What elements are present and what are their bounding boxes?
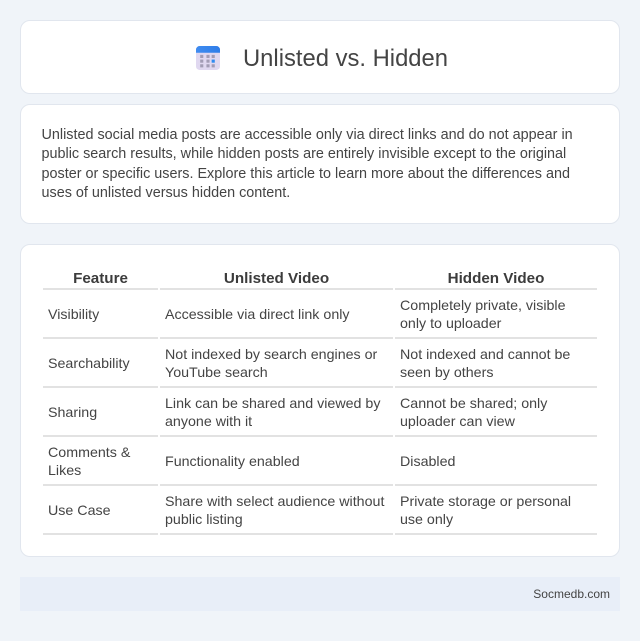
intro text: uses of unlisted versus hidden content. bbox=[42, 185, 290, 201]
row: sharing: Cannot be shared; only bbox=[400, 396, 547, 412]
row: visibility bbox=[48, 298, 566, 332]
panel: comparison table bbox=[20, 244, 620, 557]
intro text: poster or specific users. Explore this article to learn more about the differences and bbox=[42, 166, 570, 182]
row: searchability: seen by others bbox=[400, 365, 493, 381]
row: comments and likes: Functionality enabled bbox=[165, 454, 300, 470]
row: comments and likes: Likes bbox=[48, 463, 81, 479]
icon: calendar bbox=[196, 46, 220, 70]
row: use case bbox=[48, 494, 571, 528]
intro text bbox=[42, 127, 573, 201]
table header: Hidden Video bbox=[448, 270, 544, 287]
panel: introduction bbox=[20, 104, 620, 224]
intro text: public search results, while hidden posts are entirely invisible except to the original bbox=[42, 146, 566, 162]
row: comments and likes: Comments & bbox=[48, 445, 130, 461]
row: use case: Use Case bbox=[48, 503, 111, 519]
footer source text: Socmedb.com bbox=[533, 587, 610, 601]
row: sharing: anyone with it bbox=[165, 414, 252, 430]
table header: Unlisted Video bbox=[224, 270, 329, 287]
row: sharing bbox=[48, 396, 548, 430]
intro text: Unlisted social media posts are accessible only via direct links and do not appear in bbox=[42, 127, 573, 143]
row: visibility: only to uploader bbox=[400, 316, 501, 332]
row: comments and likes bbox=[48, 445, 455, 479]
row: use case: Private storage or personal bbox=[400, 494, 571, 510]
row: visibility: Accessible via direct link only bbox=[165, 307, 350, 323]
row: searchability bbox=[48, 347, 570, 381]
title: Unlisted vs. Hidden bbox=[243, 45, 448, 72]
row: use case: Share with select audience without bbox=[165, 494, 384, 510]
table header bbox=[73, 270, 544, 287]
row: searchability: Searchability bbox=[48, 356, 130, 372]
footer bar bbox=[20, 577, 620, 611]
table header: Feature bbox=[73, 270, 128, 287]
row: sharing: Sharing bbox=[48, 405, 97, 421]
row: comments and likes: Disabled bbox=[400, 454, 455, 470]
row: sharing: uploader can view bbox=[400, 414, 515, 430]
row: searchability: Not indexed by search engines or bbox=[165, 347, 377, 363]
row: visibility: Visibility bbox=[48, 307, 99, 323]
row: searchability: Not indexed and cannot be bbox=[400, 347, 570, 363]
row: sharing: Link can be shared and viewed by bbox=[165, 396, 380, 412]
row: use case: use only bbox=[400, 512, 453, 528]
panel: title card bbox=[20, 20, 620, 94]
row: visibility: Completely private, visible bbox=[400, 298, 566, 314]
row: use case: public listing bbox=[165, 512, 243, 528]
row: searchability: YouTube search bbox=[165, 365, 268, 381]
